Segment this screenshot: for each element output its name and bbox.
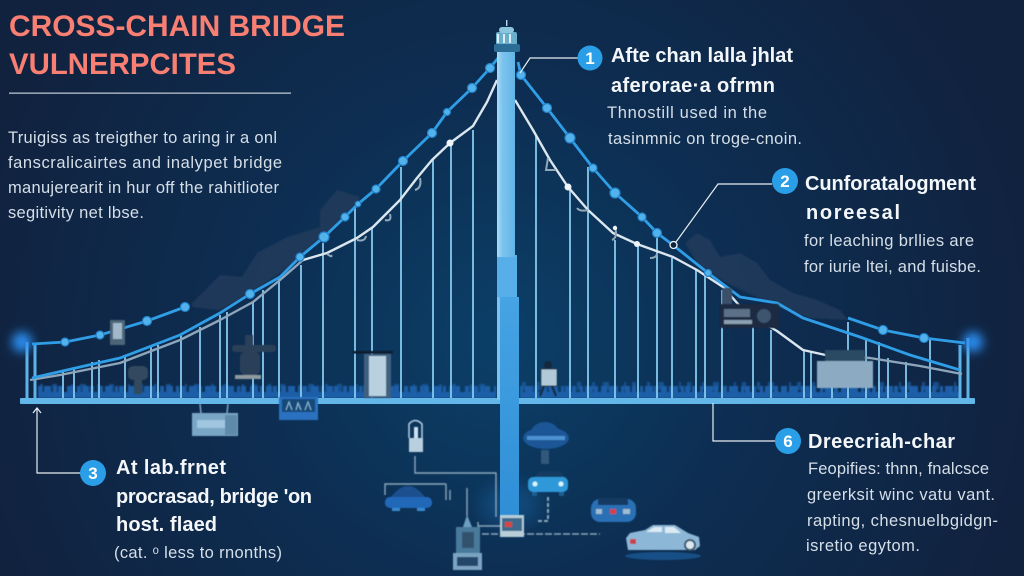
blue main cable with nodes <box>32 58 965 378</box>
callout 2 text: Cunforatalogment <box>805 173 976 195</box>
icon: small robot <box>540 361 557 396</box>
icon: grey box right <box>817 350 873 388</box>
callout 6 text: Dreecriah-char <box>808 431 955 453</box>
vertical hangers <box>63 130 930 400</box>
callout 6 text: isretio egytom. <box>806 537 920 555</box>
icon: lantern <box>409 420 423 452</box>
callout 6 text <box>806 431 998 555</box>
white cable <box>30 80 962 380</box>
connector lines <box>385 456 600 534</box>
icon: device on cable <box>110 320 125 345</box>
badge 2 <box>772 168 798 194</box>
icon: blue monitor <box>279 397 318 420</box>
callout 1 <box>520 45 802 148</box>
icon: small screen <box>500 515 524 537</box>
intro text block: Truigiss as treigther to aring ir a onl <box>8 129 277 147</box>
callout 1 text: aferorae·a ofrmn <box>611 75 775 97</box>
intro text block: fanscralicairtes and inalypet bridge <box>8 154 282 172</box>
leader line 2 <box>670 184 772 248</box>
icon: blue cloud <box>523 422 569 464</box>
icon: rear blue car <box>591 498 636 522</box>
leader line 6 <box>713 403 775 441</box>
icon: dark drone <box>232 335 276 379</box>
badge 1: 1 <box>585 49 595 68</box>
badge 3 <box>80 460 106 486</box>
callout 6 text: greerksit winc vatu vant. <box>807 486 995 504</box>
badge 6: 6 <box>783 432 793 451</box>
badge 3: 3 <box>88 464 98 483</box>
callout 1 text: tasinmnic on troge-cnoin. <box>608 130 802 148</box>
glowing end lights <box>12 332 983 352</box>
intro text block: manujerearit in hur off the rahitlioter <box>8 179 280 197</box>
callout 6 text: rapting, chesnuelbgidgn- <box>807 512 998 530</box>
title <box>9 10 345 81</box>
callout 3 text <box>114 457 312 562</box>
callout 3 text: At lab.frnet <box>116 457 226 479</box>
badge 6 <box>775 428 801 454</box>
callout 3 text: host. flaed <box>116 514 217 536</box>
callout 2 text <box>804 173 981 276</box>
smoke clouds behind bridge <box>192 190 848 320</box>
callout 3 <box>33 408 312 562</box>
title: VULNERPCITES <box>9 48 236 81</box>
title rule <box>9 92 291 94</box>
central tower <box>480 20 540 527</box>
intro text block: segitivity net lbse. <box>8 204 144 222</box>
callout 1 text: Afte chan lalla jhlat <box>611 45 793 67</box>
intro text block <box>8 129 282 222</box>
icon: blue dome car <box>385 486 432 511</box>
callout 2 text: for iurie ltei, and fuisbe. <box>804 258 981 276</box>
badge 1 <box>578 46 602 70</box>
icon: dark machine left <box>128 366 148 394</box>
callout 6 text: Feopifies: thnn, fnalcsce <box>808 460 989 478</box>
icon: elevator box <box>353 351 393 398</box>
callout 1 text: Thnostill used in the <box>607 104 767 122</box>
icon: dark machine right <box>720 288 779 328</box>
leader arrow 3 <box>33 408 81 473</box>
icon: printer machine <box>453 515 482 570</box>
callout 2 <box>670 168 981 276</box>
callout 3 text: procrasad, bridge 'on <box>116 486 312 508</box>
small cable hooks <box>327 158 657 258</box>
callout 3 text: (cat. ᵒ less to rnonths) <box>114 544 282 562</box>
callout 1 text <box>607 45 802 148</box>
callout 2 text: noreesal <box>806 202 900 224</box>
callout 6 <box>713 403 998 555</box>
title: CROSS-CHAIN BRIDGE <box>9 10 345 43</box>
leader line 1 <box>520 58 578 73</box>
icon: front blue car <box>528 471 568 496</box>
icon: white sedan <box>625 525 701 560</box>
callout 2 text: for leaching brllies are <box>804 232 974 250</box>
badge 2: 2 <box>780 172 790 191</box>
network below deck <box>385 420 701 570</box>
tree line along deck <box>38 386 960 398</box>
deck <box>20 398 975 404</box>
icon: hanging server box <box>192 404 238 436</box>
bridge equipment icons <box>110 288 873 436</box>
